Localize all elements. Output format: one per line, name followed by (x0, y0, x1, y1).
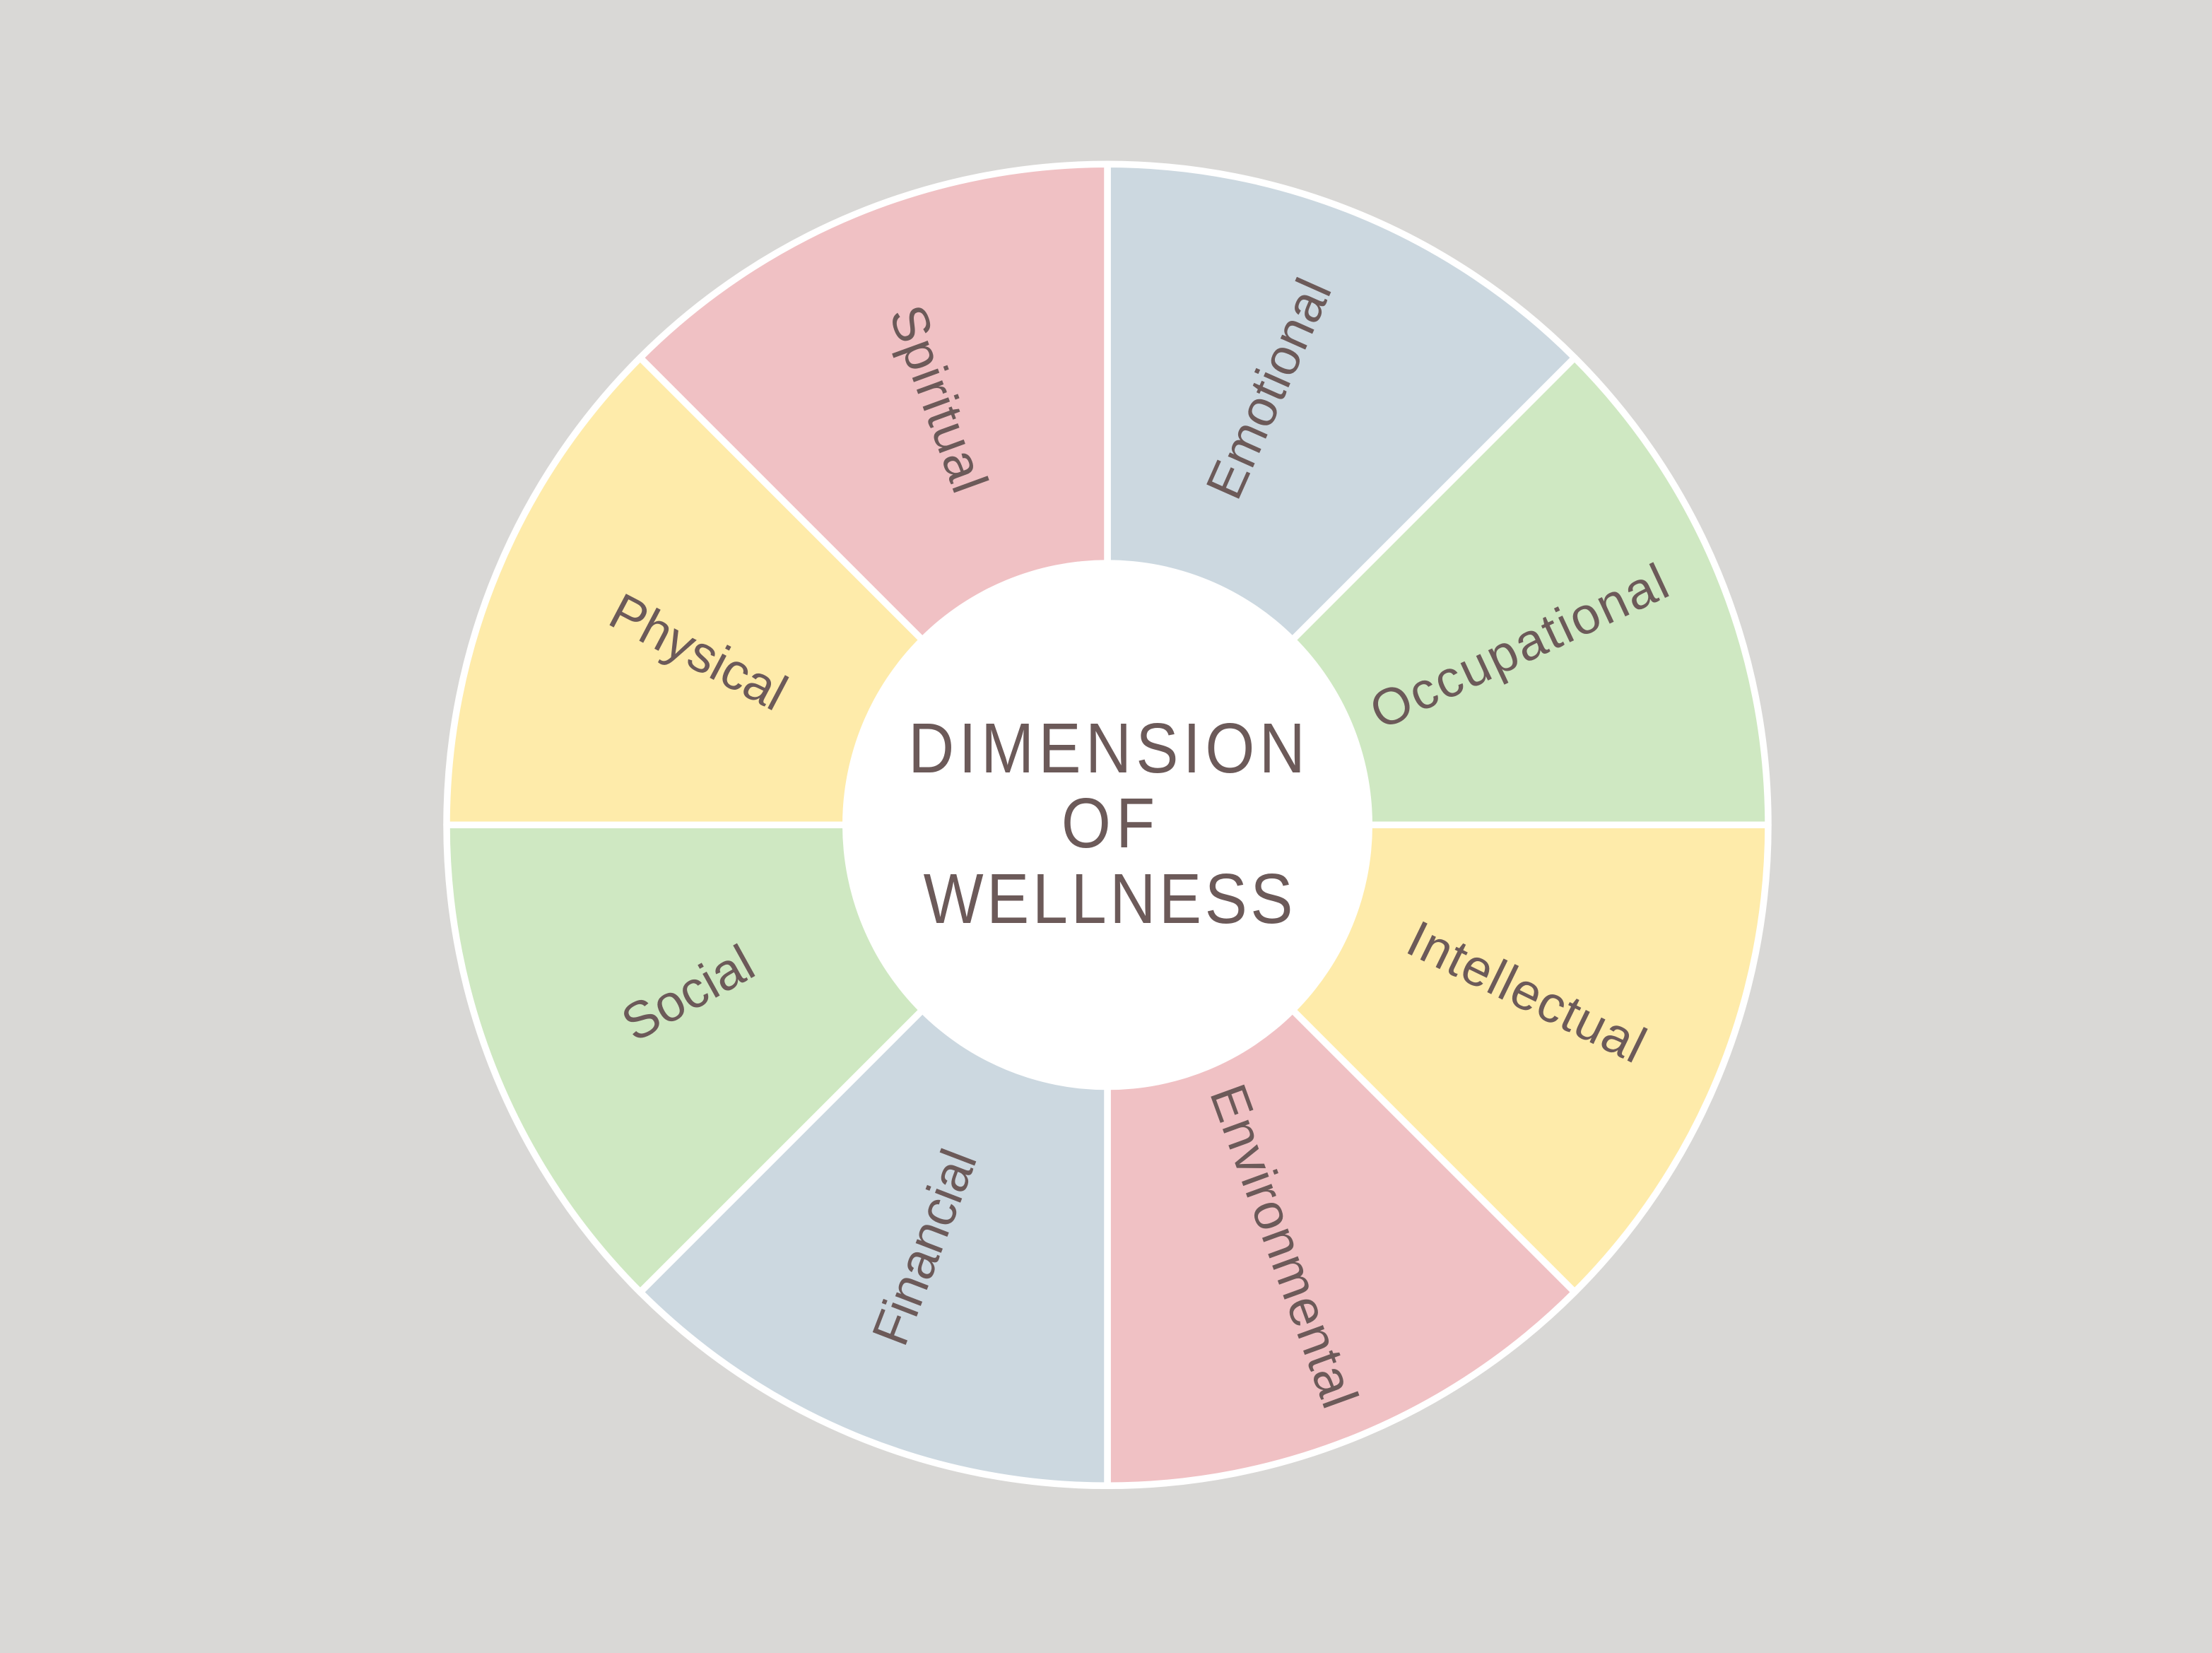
panel: Intellectual segment (1107, 825, 1768, 1292)
label: Spiritual: Spiritual (878, 298, 999, 500)
wedge: Financial (640, 825, 1107, 1486)
label: Environmental: Environmental (1199, 1077, 1368, 1416)
title: OF (1061, 784, 1155, 863)
wedge: Spiritual (640, 164, 1107, 825)
label: Intellectual: Intellectual (1399, 910, 1654, 1074)
wedge: Intellectual (1107, 825, 1768, 1292)
wedge: Emotional (1107, 164, 1575, 825)
label: Physical: Physical (601, 582, 796, 722)
wedge: Physical (447, 358, 1107, 825)
panel: Occupational segment (1107, 358, 1768, 825)
wedge: Social (447, 825, 1107, 1292)
title (908, 710, 1305, 939)
wellness wheel (447, 164, 1768, 1486)
title: WELLNESS (924, 860, 1293, 939)
label: Financial: Financial (861, 1142, 988, 1353)
label: Emotional: Emotional (1195, 270, 1343, 507)
wedge: Environmental (1107, 825, 1575, 1486)
panel: Spiritual segment (640, 164, 1107, 825)
panel: Social segment (447, 825, 1107, 1292)
center circle (842, 560, 1372, 1090)
label: Social: Social (612, 934, 764, 1052)
panel: Emotional segment (1107, 164, 1575, 825)
wedge: Occupational (1107, 358, 1768, 825)
panel: Environmental segment (1107, 825, 1575, 1486)
panel: Physical segment (447, 358, 1107, 825)
label: Occupational: Occupational (1361, 553, 1677, 741)
title: DIMENSION (908, 710, 1305, 788)
panel: Financial segment (640, 825, 1107, 1486)
